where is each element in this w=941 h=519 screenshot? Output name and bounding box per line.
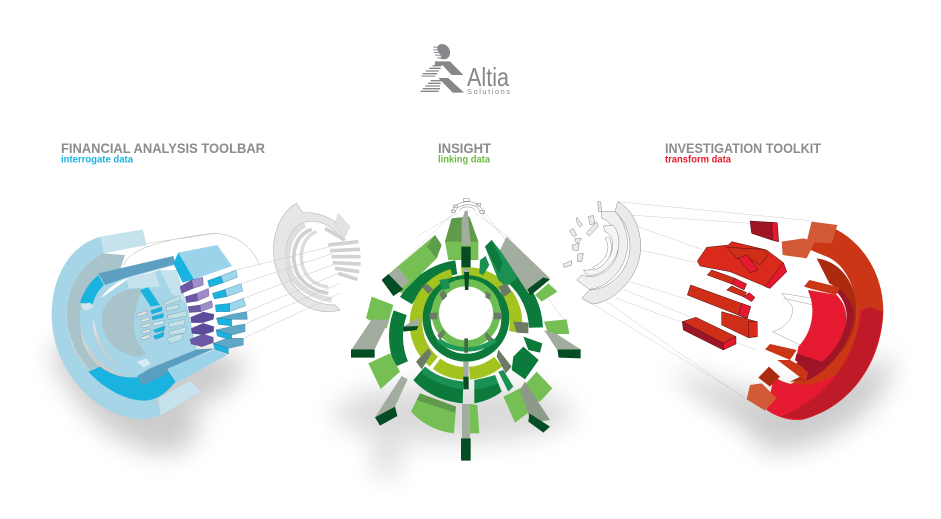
crescent end caps: [807, 222, 837, 243]
panel: insight diagram: [333, 199, 581, 480]
ghost connector lines: [592, 202, 810, 400]
ghost inner outline: [773, 293, 813, 347]
ghost top ring: [452, 199, 485, 215]
panel: investigation diagram: [563, 202, 893, 451]
crescent lower red: [767, 307, 883, 420]
ring B dark green: [427, 279, 505, 358]
centre spokes: [403, 211, 528, 461]
main crescent dark band: [767, 222, 883, 420]
ghost connector lines: [383, 213, 567, 323]
ring C yellow-green segments: [396, 253, 536, 394]
cylinder outline: [123, 233, 259, 265]
ghost ring: [273, 203, 361, 312]
small tabs: [80, 303, 94, 311]
heading: financial analysis toolbar: FINANCIAL ANALYSIS TOOLBAR: [61, 140, 265, 156]
inner bright face: [797, 290, 846, 363]
column: small cyan blocks: [151, 307, 165, 339]
cyan lower arc: [88, 367, 176, 401]
heading: investigation toolkit: [665, 140, 821, 166]
ring end caps: [101, 229, 147, 253]
ring D segments: [367, 231, 565, 433]
heading: investigation toolkit: transform data: [665, 154, 731, 166]
centre drum: [134, 287, 190, 353]
logo tagline: Solutions: [467, 87, 510, 96]
grey beams with dark ends: [351, 237, 581, 433]
heading: insight: linking data: [438, 154, 490, 166]
panel: financial analysis diagram: [50, 203, 361, 453]
inner dark ring: [790, 258, 857, 382]
outer ring: [52, 237, 161, 419]
inner tab top: [804, 280, 840, 295]
cyan segment: [80, 275, 104, 304]
inner tabs bottom: [758, 344, 822, 387]
ring A light green: [435, 283, 497, 344]
mid-green blocks: [413, 240, 542, 403]
heading: insight: [438, 140, 491, 166]
inner ring: [80, 257, 200, 380]
drop shadow: [670, 357, 893, 451]
column: purple blocks: [180, 277, 214, 347]
column: cyan blocks: [208, 270, 247, 354]
heading: financial analysis toolbar: [61, 140, 265, 166]
floating red blocks: [682, 221, 787, 350]
column: small grey blocks: [137, 311, 151, 340]
top block: [178, 245, 232, 279]
heading: financial analysis toolbar: interrogate data: [61, 154, 133, 166]
ghost ring: [563, 202, 641, 304]
ghost connector lines: [147, 233, 340, 338]
heading: investigation toolkit: INVESTIGATION TOOLKIT: [665, 140, 821, 156]
logo wordmark: Altia: [467, 62, 509, 92]
drop shadow: [50, 323, 244, 453]
logo: Altia Solutions: [421, 44, 510, 96]
top strip: [98, 256, 175, 285]
interior backing: [93, 270, 197, 377]
column: pale blocks: [163, 295, 187, 343]
large light-green blocks: [366, 217, 569, 433]
icon: logo figure: [421, 44, 464, 93]
grey core: [102, 288, 147, 357]
heading: insight: INSIGHT: [438, 140, 491, 156]
lower strips: [147, 343, 197, 368]
drop shadow: [333, 383, 573, 480]
grey band: [67, 253, 125, 370]
